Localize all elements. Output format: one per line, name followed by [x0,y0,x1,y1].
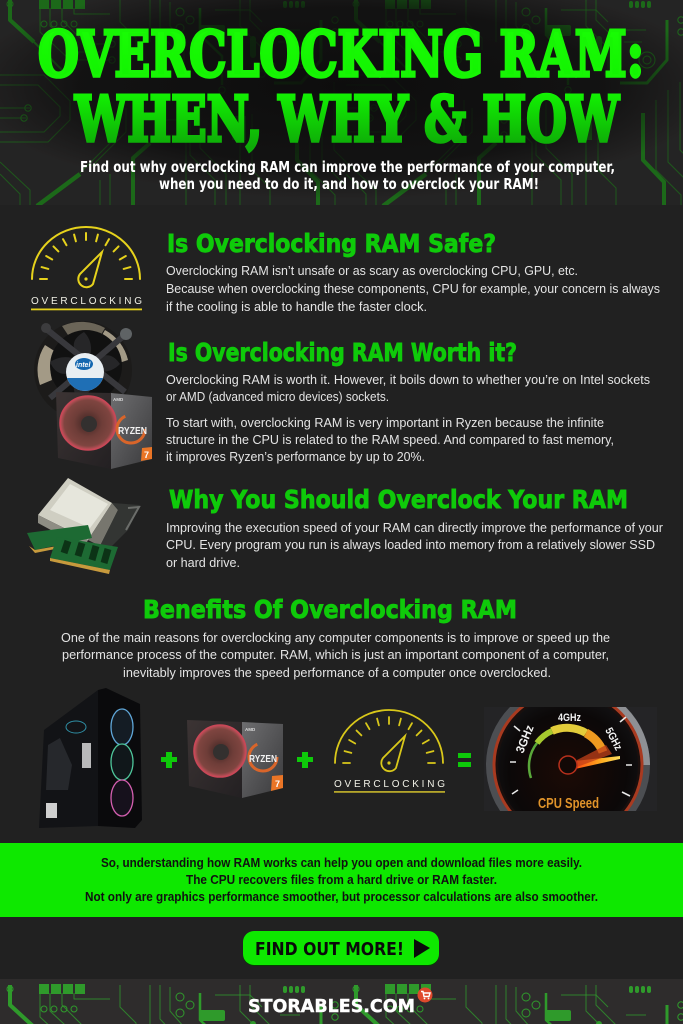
panel: green summary band [0,843,683,917]
button: find out more [243,931,439,966]
panel: green summary band: The CPU recovers files from a hard drive or RAM faster. [186,872,497,887]
text: worth it: To start with, overclocking RAM is very important in Ryzen because the infinite [166,415,604,430]
title [38,17,644,156]
chart: cpu speed dial: 5GHz [602,726,624,753]
chart: cpu speed dial: 4GHz [558,712,581,724]
icon: pc case [39,688,142,828]
text: is it safe: Overclocking RAM isn’t unsafe or as scary as overclocking CPU, GPU, etc. [166,263,578,278]
icon: ryzen box: 7 [144,450,149,460]
text: why overclock: CPU. Every program you run is always loaded into memory from a relatively slower SSD [166,537,655,552]
text: benefits: performance process of the computer. RAM, which is just an important component of a computer, [62,647,609,662]
footer logo: storables.com: STORABLES.COM [248,996,415,1017]
text: benefits: One of the main reasons for overclocking any computer components is to improve or speed up the [61,630,610,645]
heading: benefits: Benefits Of Overclocking RAM [143,595,517,624]
chart: cpu speed dial: CPU Speed [538,795,599,812]
icon: overclocking gauge small: OVERCLOCKING [334,779,445,790]
chart: cpu speed dial: 3GHz [513,723,537,755]
panel: green summary band: Not only are graphics performance smoother, but processor calculations are also smoother. [85,889,598,904]
plus sign [297,752,313,768]
icon: intel cooler [34,321,132,419]
icon: ryzen box small: AMD [245,727,256,732]
footer circuit background [0,979,683,1024]
text: why overclock [166,520,664,570]
text: worth it: or AMD (advanced micro devices) sockets. [166,389,389,404]
text: worth it [166,372,650,464]
equals sign [458,753,471,767]
icon: ryzen box: AMD [113,397,124,402]
heading: worth it: Is Overclocking RAM Worth it? [168,338,517,367]
icon: ryzen box small [187,720,283,798]
text: why overclock: or hard drive. [166,555,240,570]
button: find out more: FIND OUT MORE! [255,939,404,960]
icon: hard drive and ram sticks [27,478,140,574]
icon: ryzen box small: 7 [275,779,280,789]
icon: overclocking gauge small [334,710,445,793]
icon: ryzen box: RYZEN [118,426,147,437]
text: benefits [61,630,610,680]
text: why overclock: Improving the execution speed of your RAM can directly improve the performance of your [166,520,664,535]
icon: ryzen box small: RYZEN [249,754,277,765]
icon: overclocking gauge: OVERCLOCKING [31,296,142,307]
icon: shopping cart badge [418,988,432,1002]
plus sign [161,752,177,768]
text: worth it: Overclocking RAM is worth it. However, it boils down to whether you’re on Intel sockets [166,372,650,387]
chart: cpu speed dial [486,707,650,811]
icon: ryzen box [56,392,152,469]
text: is it safe [166,263,660,314]
subtitle: when you need to do it, and how to overclock your RAM! [159,175,539,193]
icon: intel cooler: intel [76,362,91,369]
text: benefits: inevitably improves the speed performance of a computer once overclocked. [123,665,551,680]
text: worth it: it improves Ryzen’s performance by up to 20%. [166,449,425,464]
text: is it safe: Because when overclocking these components, CPU for example, your concern is always [166,281,660,296]
header circuit background [0,0,683,205]
text: is it safe: if the cooling is able to handle the faster clock. [166,299,427,314]
panel: green summary band: So, understanding how RAM works can help you open and download files more easily. [101,855,582,870]
icon: overclocking gauge [31,227,142,310]
subtitle [80,158,615,193]
heading: is it safe: Is Overclocking RAM Safe? [167,229,496,258]
heading: why overclock: Why You Should Overclock Your RAM [169,485,628,514]
text: worth it: structure in the CPU is related to the RAM speed. And compared to fast memory, [166,432,614,447]
